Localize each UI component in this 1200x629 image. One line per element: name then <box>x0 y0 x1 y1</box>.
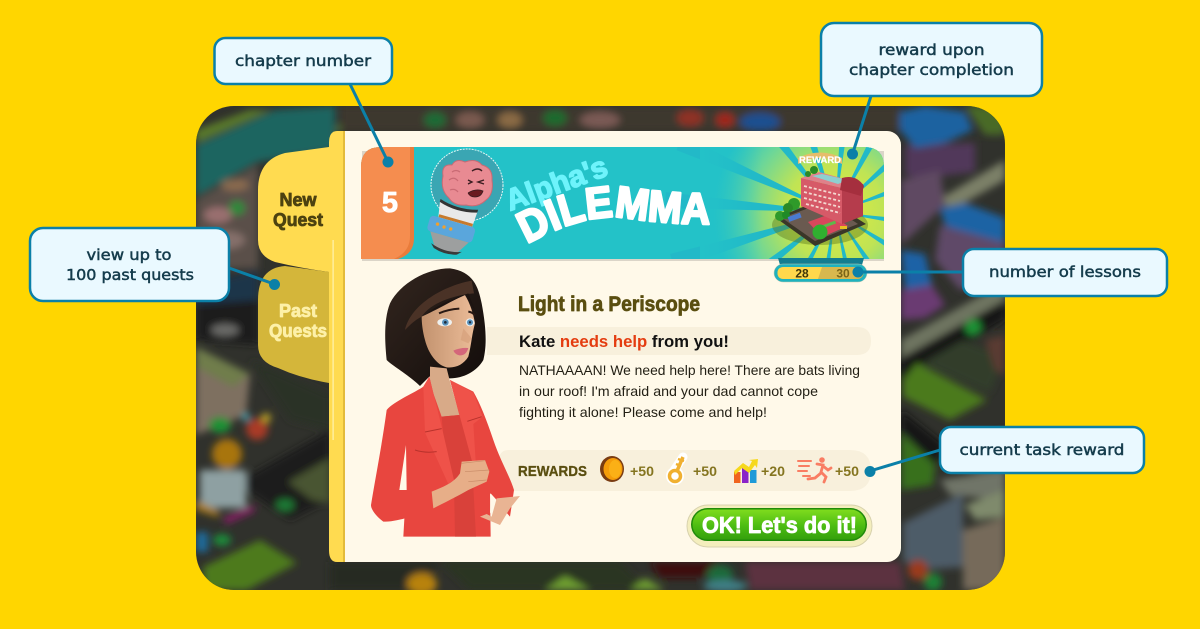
rewards row <box>497 450 871 491</box>
callout: current task reward: current task reward <box>960 441 1124 459</box>
icon: growth chart <box>734 459 758 483</box>
icon: reward building: REWARD <box>799 155 842 165</box>
tab: new quest: Quest <box>273 210 323 230</box>
callout: number of lessons <box>852 249 1167 296</box>
rewards row: REWARDS <box>518 464 587 480</box>
tab: past quests: Quests <box>269 321 327 341</box>
callout: view up to 100 past quests: 100 past quests <box>66 266 194 284</box>
callout: reward upon chapter completion <box>821 23 1042 160</box>
lesson progress bar <box>774 258 867 282</box>
quest message text: fighting it alone! Please come and help! <box>519 404 767 420</box>
callout: chapter number: chapter number <box>235 52 372 70</box>
illustration: Kate character <box>371 268 520 537</box>
quest message text: in our roof! I'm afraid and your dad cannot cope <box>519 383 818 399</box>
chapter number tag: 5 <box>382 187 398 219</box>
tab: past quests <box>258 266 329 383</box>
callout: reward upon chapter completion: chapter completion <box>849 61 1014 79</box>
quest message text <box>519 362 860 420</box>
quest message text: NATHAAAAN! We need help here! There are bats living <box>519 362 860 378</box>
subheading pill <box>487 327 871 355</box>
rewards row: +50 <box>693 463 717 479</box>
chapter number tag <box>361 147 414 259</box>
callout: reward upon chapter completion: reward upon <box>878 41 984 59</box>
chapter title: DILEMMA <box>514 185 710 244</box>
icon: running figure <box>798 457 831 482</box>
callout: view up to 100 past quests <box>30 228 280 301</box>
callout: number of lessons: number of lessons <box>989 263 1141 281</box>
quest title: Light in a Periscope <box>518 293 700 316</box>
icon: brain in a bulb <box>422 149 503 260</box>
rewards row: +20 <box>761 463 785 479</box>
callout: chapter number <box>214 38 394 168</box>
blurred city game background <box>196 106 1005 595</box>
quest card panel <box>329 131 901 562</box>
tab: new quest <box>258 147 329 272</box>
rewards row: +50 <box>835 463 859 479</box>
callout: view up to 100 past quests: view up to <box>86 246 172 264</box>
button: OK let's do it <box>687 505 872 547</box>
chapter banner <box>361 147 884 261</box>
lesson progress bar: 28 <box>795 266 809 280</box>
rewards row: +50 <box>630 463 654 479</box>
button: OK let's do it: OK! Let's do it! <box>702 512 857 538</box>
tab: new quest: New <box>279 190 318 210</box>
icon: coin <box>600 456 624 482</box>
callout: current task reward <box>864 427 1144 477</box>
lesson progress bar: 30 <box>836 266 850 280</box>
chapter title: Alpha's <box>501 150 612 218</box>
subheading pill: Kate needs help from you! <box>519 333 729 351</box>
icon: key <box>666 457 684 485</box>
chapter title <box>501 150 710 244</box>
icon: reward building <box>772 152 868 246</box>
tab: past quests: Past <box>279 301 317 321</box>
